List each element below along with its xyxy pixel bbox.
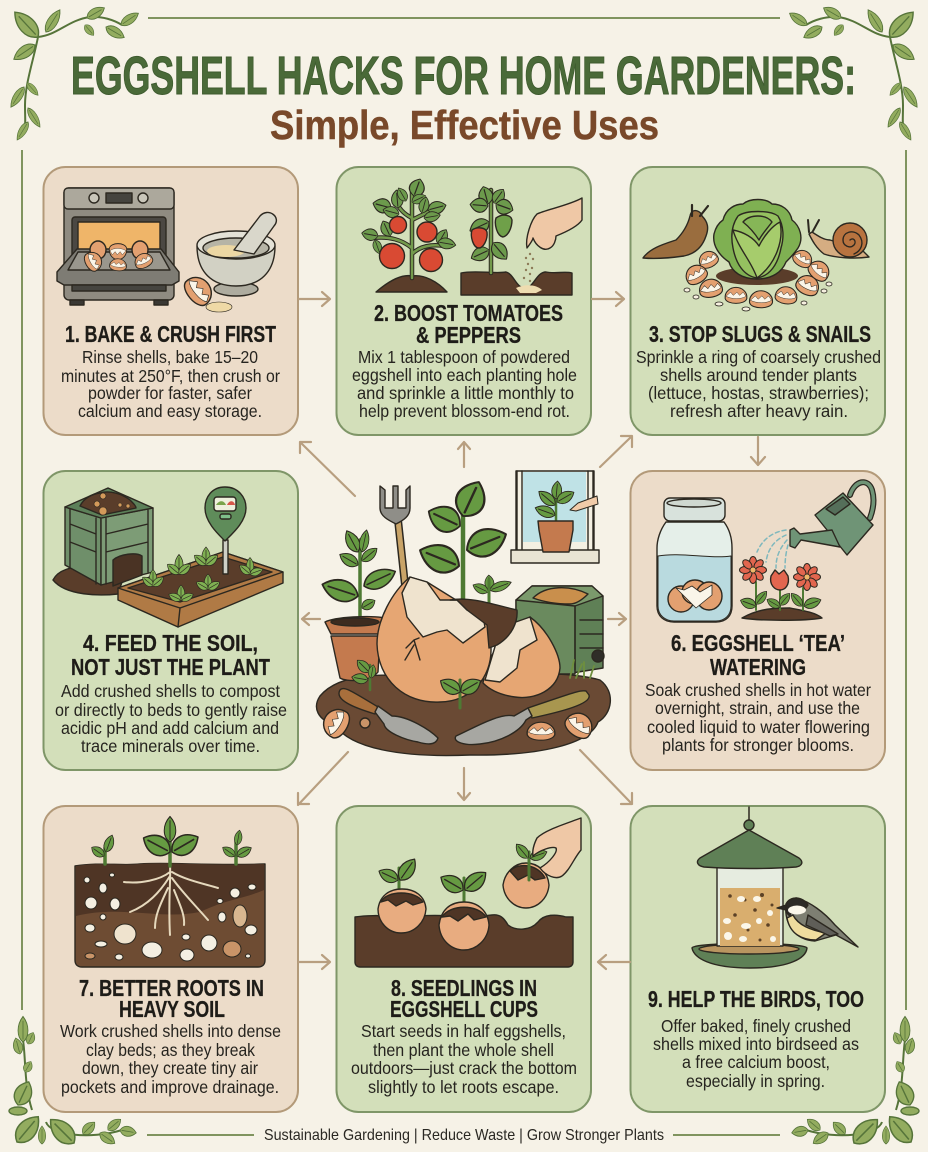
body text: refresh after heavy rain. [670, 401, 848, 421]
tall plant [415, 476, 513, 604]
left trowel [339, 689, 438, 744]
body text: or directly to beds to gently raise [55, 700, 287, 720]
body text: Soak crushed shells in hot water [645, 680, 871, 700]
body text [351, 1021, 577, 1097]
body text [645, 680, 871, 755]
heading [71, 630, 270, 680]
icon: bird feeder with chickadee [692, 807, 858, 968]
body text: outdoors—just crack the bottom [351, 1058, 577, 1078]
vine: bottom left corner [9, 1016, 137, 1149]
arrow: centre to card 8 [458, 768, 470, 800]
panel: 4 feed the soil [44, 471, 298, 770]
body text: and sprinkle a little monthly to [357, 383, 574, 403]
icon: tomato and pepper plants with hand [361, 177, 582, 295]
heading: 4. FEED THE SOIL, [83, 630, 258, 656]
arrow: centre to card 4 [302, 613, 320, 625]
body text [653, 1016, 859, 1091]
panel: 1 bake and crush [44, 167, 298, 435]
shell pieces [318, 704, 597, 743]
arrow: card 7 to card 8 [299, 955, 330, 969]
icon: lettuce, slug, snail and shell ring [643, 200, 869, 311]
body text [61, 347, 280, 421]
heading: 6. EGGSHELL ‘TEA’ [671, 630, 845, 656]
body text: shells around tender plants [660, 365, 857, 385]
arrow: card 1 to card 2 [299, 292, 330, 306]
body text: especially in spring. [686, 1071, 825, 1091]
seedling [437, 675, 484, 708]
compost bin [516, 586, 604, 678]
arrow: centre to card 6 [608, 613, 626, 625]
panel: 2 boost tomatoes and peppers [336, 167, 591, 435]
title [71, 46, 856, 148]
heading [671, 630, 845, 680]
body text: acidic pH and add calcium and [61, 718, 279, 738]
heading: WATERING [710, 654, 806, 680]
heading [390, 975, 538, 1022]
vine: top right corner [787, 4, 921, 142]
heading: 1. BAKE & CRUSH FIRST [65, 321, 276, 347]
body text: slightly to let roots escape. [368, 1077, 559, 1097]
potted plant [319, 528, 399, 690]
body text: Add crushed shells to compost [61, 681, 280, 701]
body text: Rinse shells, bake 15–20 [82, 347, 258, 367]
title: Simple, Effective Uses [270, 102, 659, 148]
panel: 6 eggshell tea watering [630, 471, 885, 770]
icon: seedlings in eggshell cups with hand [355, 818, 581, 967]
panel: 7 better roots [44, 806, 298, 1112]
body text: minutes at 250°F, then crush or [61, 366, 280, 386]
body text: clay beds; as they break [86, 1040, 255, 1060]
arrow: centre to card 3 [600, 436, 632, 467]
body text: Sprinkle a ring of coarsely crushed [636, 347, 881, 367]
heading: & PEPPERS [416, 322, 521, 348]
footer tagline: Sustainable Gardening | Reduce Waste | Grow Stronger Plants [264, 1127, 664, 1144]
arrow: centre to card 2 [458, 442, 470, 467]
body text: Start seeds in half eggshells, [361, 1021, 566, 1041]
vine: bottom right corner [791, 1016, 919, 1149]
arrow: card 9 to card 8 [598, 955, 630, 969]
body text: pockets and improve drainage. [61, 1077, 279, 1097]
icon: soil cross section with roots [75, 816, 265, 967]
heading [79, 975, 264, 1022]
body text: trace minerals over time. [81, 736, 260, 756]
body text: down, they create tiny air [82, 1058, 258, 1078]
body text: shells mixed into birdseed as [653, 1034, 859, 1054]
heading [374, 300, 563, 348]
arrow: centre to card 7 [298, 752, 348, 805]
heading: NOT JUST THE PLANT [71, 654, 270, 680]
window with potted plant [511, 471, 599, 563]
body text: a free calcium boost, [682, 1052, 830, 1072]
body text: powder for faster, safer [88, 383, 252, 403]
body text [60, 1021, 281, 1097]
icon: oven and mortar [57, 188, 276, 312]
heading: 7. BETTER ROOTS IN [79, 975, 264, 1001]
arrow: card 3 to card 6 [751, 437, 765, 465]
body text: calcium and easy storage. [78, 401, 262, 421]
fork [380, 486, 410, 585]
body text: overnight, strain, and use the [655, 698, 860, 718]
body text: Work crushed shells into dense [60, 1021, 281, 1041]
arrow: card 2 to card 3 [592, 292, 624, 306]
body text: (lettuce, hostas, strawberries); [648, 383, 869, 403]
big cracked eggshell [377, 577, 517, 702]
heading: HEAVY SOIL [119, 996, 225, 1022]
panel: 8 seedlings in eggshell cups [336, 806, 591, 1112]
body text: help prevent blossom-end rot. [359, 401, 570, 421]
panel: 3 stop slugs and snails [630, 167, 885, 435]
vine: top left corner [7, 4, 141, 142]
arrow: centre to card 1 [300, 442, 355, 496]
right trowel [455, 691, 589, 745]
body text: plants for stronger blooms. [662, 735, 854, 755]
heading: 8. SEEDLINGS IN [391, 975, 537, 1001]
icon: jar, watering can, flowers [657, 482, 873, 622]
body text: Mix 1 tablespoon of powdered [358, 347, 570, 367]
body text: cooled liquid to water flowering [647, 717, 870, 737]
heading: 2. BOOST TOMATOES [374, 300, 563, 326]
heading: 9. HELP THE BIRDS, TOO [648, 986, 864, 1012]
body text: then plant the whole shell [373, 1040, 554, 1060]
body text [636, 347, 881, 421]
icon: compost bin, raised bed, soil meter [53, 487, 283, 627]
arrow: centre to card 9 [580, 750, 632, 804]
body text: eggshell into each planting hole [352, 365, 577, 385]
central illustration: eggshell garden [316, 471, 610, 756]
heading: EGGSHELL CUPS [390, 996, 538, 1022]
right eggshell half [483, 617, 560, 698]
body text: Offer baked, finely crushed [661, 1016, 851, 1036]
body text [352, 347, 577, 421]
panel: 9 help the birds [630, 806, 885, 1112]
body text [55, 681, 287, 756]
soil mound [316, 674, 610, 756]
